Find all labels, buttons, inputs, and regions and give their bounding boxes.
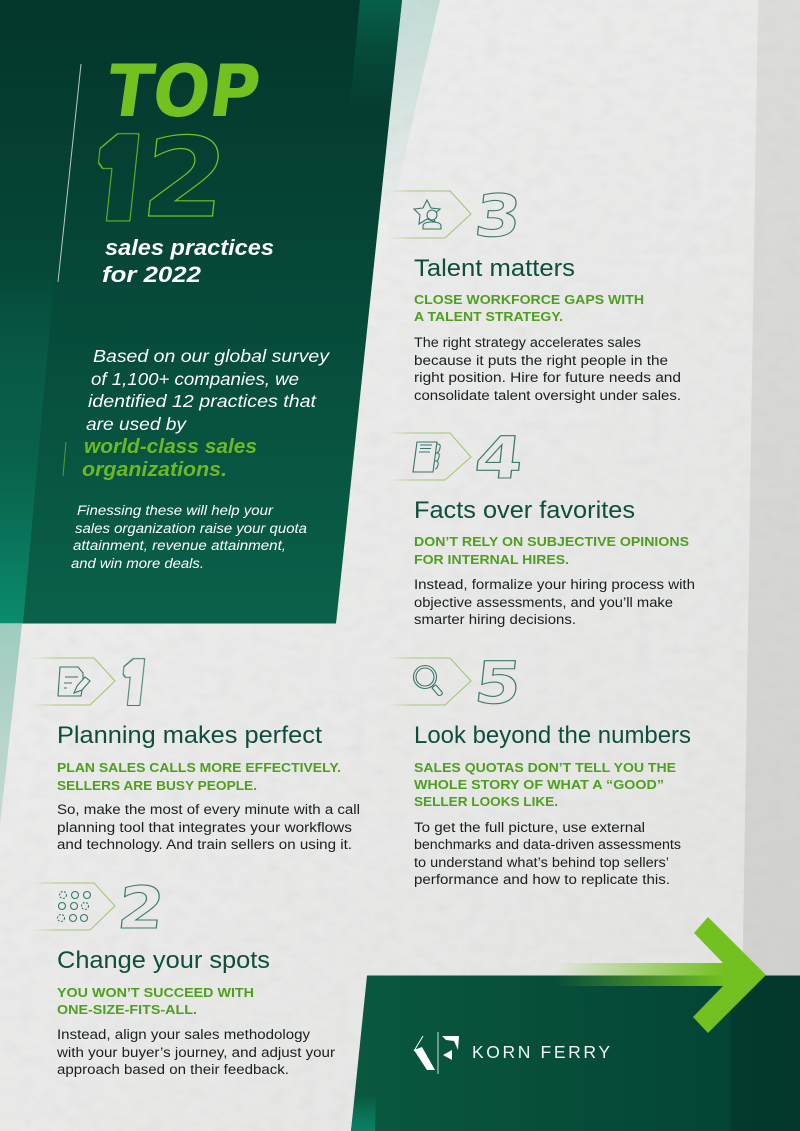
subheading: FOR INTERNAL HIRES. — [414, 552, 569, 567]
body: because it puts the right people in the — [414, 353, 668, 368]
body: approach based on their feedback. — [57, 1062, 289, 1077]
body — [414, 820, 681, 887]
subtitle — [102, 235, 274, 287]
highlight: world-class sales organizations: organizations. — [82, 459, 227, 481]
body: objective assessments, and you’ll make — [414, 595, 673, 610]
icon: dot grid — [58, 892, 90, 922]
subheading: WHOLE STORY OF WHAT A “GOOD” — [414, 777, 664, 792]
title: TOP 12: 2 — [136, 115, 234, 243]
subheading: A TALENT STRATEGY. — [414, 309, 563, 324]
body: planning tool that integrates your workflows — [57, 820, 352, 835]
chevron tag — [32, 883, 115, 930]
intro text: are used by — [86, 414, 187, 434]
highlight: world-class sales organizations — [63, 436, 257, 481]
icon: magnifying glass — [414, 666, 442, 696]
body: with your buyer’s journey, and adjust your — [56, 1045, 336, 1060]
body: So, make the most of every minute with a call — [57, 802, 360, 817]
intro text — [86, 346, 330, 434]
intro note: attainment, revenue attainment, — [73, 538, 286, 553]
subheading: SELLER LOOKS LIKE. — [414, 794, 558, 809]
number 1: 1 — [116, 658, 153, 710]
intro note: and win more deals. — [71, 556, 204, 571]
subtitle: sales practices — [105, 235, 274, 260]
intro note: Finessing these will help your — [77, 503, 274, 518]
subheading — [57, 985, 254, 1017]
practice 5 — [388, 649, 691, 887]
heading: Look beyond the numbers — [414, 722, 691, 749]
chevron tag — [388, 433, 471, 480]
subheading: PLAN SALES CALLS MORE EFFECTIVELY. — [57, 760, 341, 775]
icon: notebook — [413, 442, 440, 472]
highlight: world-class sales organizations: world-class sales — [84, 436, 257, 458]
body: benchmarks and data-driven assessments — [414, 837, 681, 852]
body: performance and how to replicate this. — [414, 872, 670, 887]
subheading: CLOSE WORKFORCE GAPS WITH — [414, 292, 644, 307]
subheading: SALES QUOTAS DON’T TELL YOU THE — [414, 760, 676, 775]
chevron tag — [32, 658, 115, 705]
body — [56, 1027, 336, 1077]
body — [414, 577, 695, 627]
practice 4 — [388, 424, 695, 627]
subheading: YOU WON’T SUCCEED WITH — [57, 985, 254, 1000]
panel: footer dark green — [351, 976, 800, 1131]
intro note — [71, 503, 308, 571]
intro text: of 1,100+ companies, we — [91, 369, 299, 389]
icon: star and person — [414, 200, 441, 229]
chevron tag — [388, 658, 471, 705]
intro text: Based on our global survey — [93, 346, 330, 366]
chevron tag — [388, 191, 471, 238]
body — [414, 335, 681, 403]
practice 3 — [388, 182, 681, 403]
body: smarter hiring decisions. — [414, 612, 576, 627]
body: consolidate talent oversight under sales. — [414, 388, 681, 403]
practice 2 — [32, 874, 336, 1077]
subheading — [414, 760, 676, 809]
practice 1 — [32, 658, 360, 852]
heading: Talent matters — [414, 255, 575, 282]
body: Instead, align your sales methodology — [57, 1027, 310, 1042]
heading: Change your spots — [57, 947, 270, 974]
body — [57, 802, 360, 852]
number 4: 4 — [472, 424, 527, 492]
number 5: 5 — [472, 649, 525, 717]
body: right position. Hire for future needs and — [414, 370, 681, 385]
body: to understand what’s behind top sellers’ — [414, 855, 669, 870]
intro text: identified 12 practices that — [88, 391, 317, 411]
intro note: sales organization raise your quota — [75, 521, 308, 536]
title: TOP 12: TOP — [101, 50, 265, 134]
title: TOP 12 — [85, 50, 265, 243]
body: Instead, formalize your hiring process with — [414, 577, 695, 592]
panel: intro dark green — [0, 0, 402, 624]
logo: Korn Ferry — [414, 1032, 610, 1074]
subheading: SELLERS ARE BUSY PEOPLE. — [57, 778, 257, 793]
heading: Planning makes perfect — [57, 722, 322, 749]
subheading: ONE-SIZE-FITS-ALL. — [57, 1002, 197, 1017]
title: TOP 12: 1 — [85, 131, 155, 229]
number 3: 3 — [472, 182, 525, 250]
body: and technology. And train sellers on using it. — [57, 837, 352, 852]
subheading: DON’T RELY ON SUBJECTIVE OPINIONS — [414, 534, 689, 549]
body: The right strategy accelerates sales — [414, 335, 641, 350]
rule beside title — [58, 64, 81, 282]
number 2: 2 — [115, 874, 168, 942]
subheading — [414, 292, 644, 324]
arrow — [555, 917, 766, 1033]
subheading — [414, 534, 689, 567]
heading: Facts over favorites — [414, 497, 635, 524]
subtitle: for 2022 — [102, 262, 202, 287]
body: To get the full picture, use external — [414, 820, 645, 835]
subheading — [57, 760, 341, 793]
icon: document and pencil — [58, 667, 90, 696]
logo: Korn Ferry: KORN FERRY — [472, 1042, 610, 1062]
